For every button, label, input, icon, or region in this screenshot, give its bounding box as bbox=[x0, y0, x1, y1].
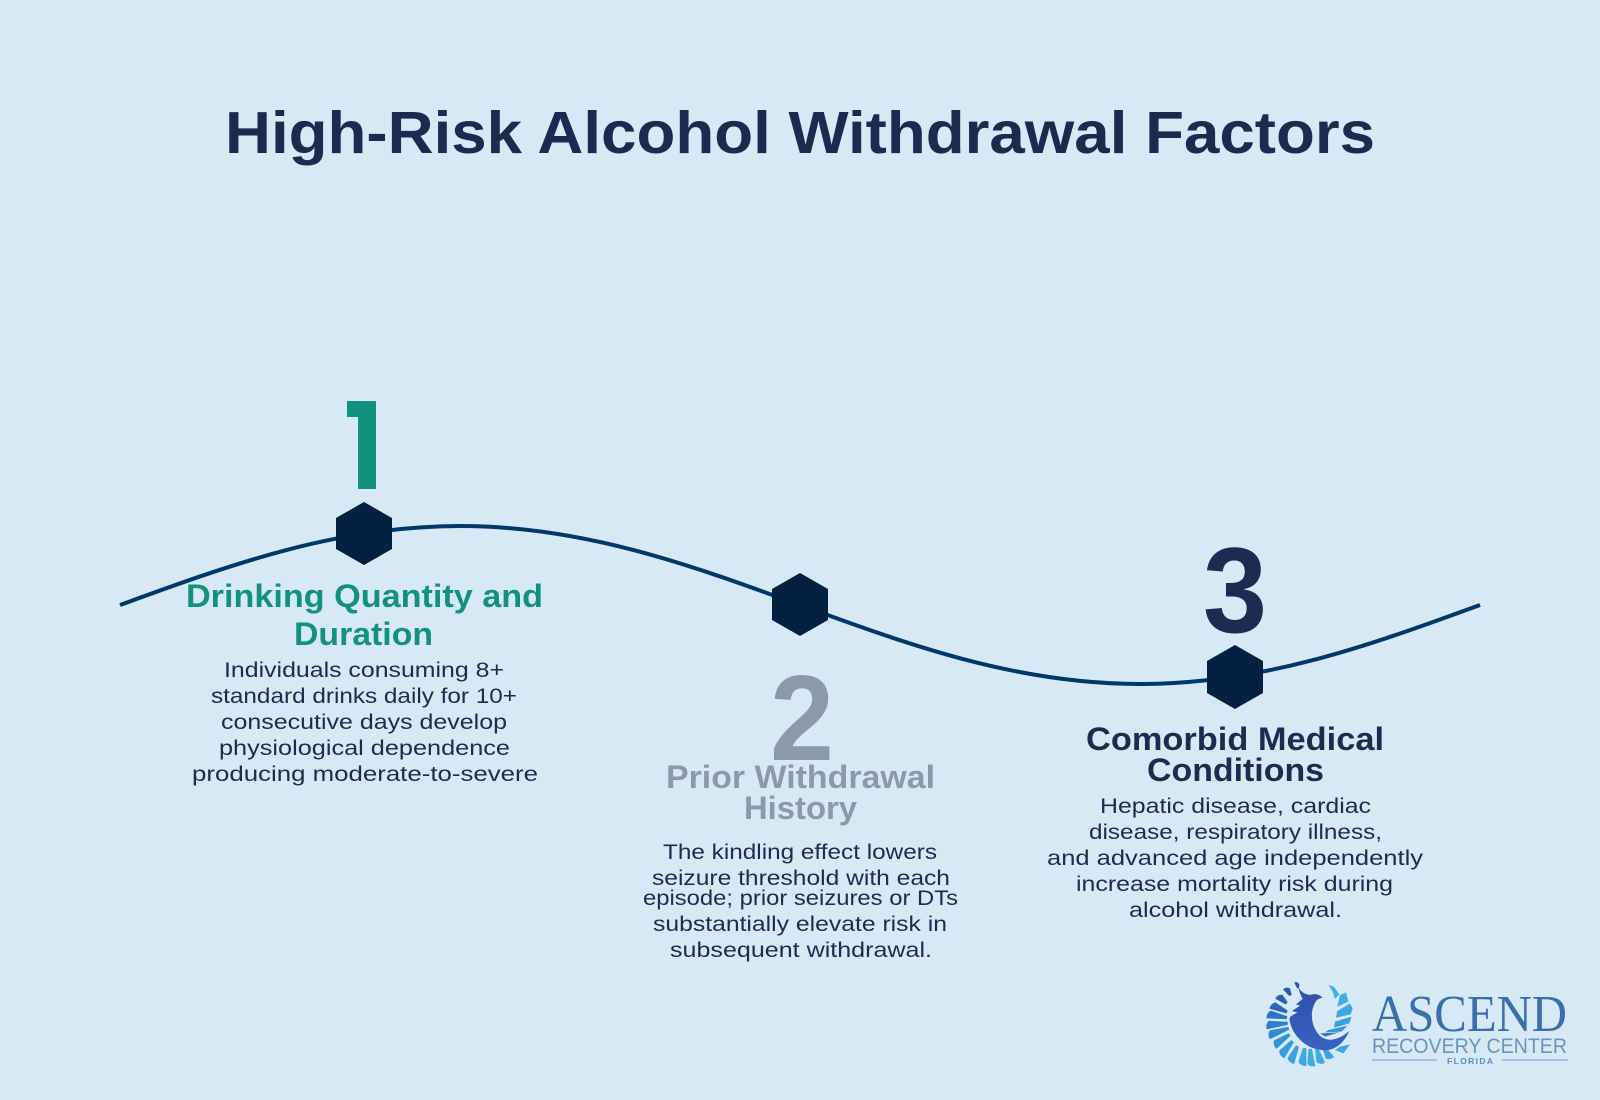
heading: factor 3: Conditions bbox=[1147, 752, 1324, 788]
body text: factor 3: disease, respiratory illness, bbox=[1089, 821, 1382, 844]
body text: factor 2: seizure threshold with each bbox=[652, 867, 950, 890]
hexagon marker 3 bbox=[1207, 645, 1263, 709]
title: High-Risk Alcohol Withdrawal Factors bbox=[225, 100, 1375, 166]
body text: factor 2: The kindling effect lowers bbox=[663, 841, 937, 864]
heading: factor 2: History bbox=[744, 790, 857, 826]
panel: factor 2 bbox=[643, 573, 958, 962]
heading: factor 1: Duration bbox=[294, 616, 433, 652]
heading: factor 3: Comorbid Medical bbox=[1086, 721, 1384, 757]
body text: factor 1: physiological dependence bbox=[219, 737, 510, 760]
wordmark: ASCEND: ASCEND bbox=[1372, 986, 1567, 1043]
wordmark: Florida: FLORIDA bbox=[1447, 1056, 1493, 1066]
number 3: 3 bbox=[1203, 522, 1267, 658]
body text: factor 3: increase mortality risk during bbox=[1076, 873, 1393, 896]
body text: factor 1: producing moderate-to-severe bbox=[192, 763, 538, 786]
body text: factor 1: consecutive days develop bbox=[221, 711, 507, 734]
body text: factor 1: Individuals consuming 8+ bbox=[224, 659, 504, 682]
number 2: 2 bbox=[770, 650, 834, 786]
icon: phoenix bbox=[1266, 981, 1353, 1067]
number 1: 1 bbox=[333, 379, 401, 515]
body text: factor 2: substantially elevate risk in bbox=[653, 913, 947, 936]
body text: factor 2: subsequent withdrawal. bbox=[670, 939, 932, 962]
body text: factor 2: episode; prior seizures or DTs bbox=[643, 887, 958, 910]
heading: factor 1: Drinking Quantity and bbox=[186, 578, 543, 614]
panel: factor 1 bbox=[186, 379, 543, 786]
number 1 bbox=[347, 401, 376, 489]
wave timeline line bbox=[120, 526, 1480, 684]
body text: factor 1: standard drinks daily for 10+ bbox=[211, 685, 517, 708]
logo: Ascend Recovery Center bbox=[1266, 981, 1568, 1067]
hexagon marker 1 bbox=[336, 502, 392, 565]
heading: factor 2: Prior Withdrawal bbox=[666, 759, 935, 795]
infographic canvas bbox=[119, 110, 1568, 1066]
hexagon marker 2 bbox=[772, 573, 828, 636]
body text: factor 3: alcohol withdrawal. bbox=[1129, 899, 1342, 922]
panel: factor 3 bbox=[1047, 522, 1424, 922]
wordmark: Recovery Center: RECOVERY CENTER bbox=[1372, 1035, 1567, 1058]
body text: factor 3: Hepatic disease, cardiac bbox=[1100, 795, 1371, 818]
body text: factor 3: and advanced age independently bbox=[1047, 847, 1424, 870]
